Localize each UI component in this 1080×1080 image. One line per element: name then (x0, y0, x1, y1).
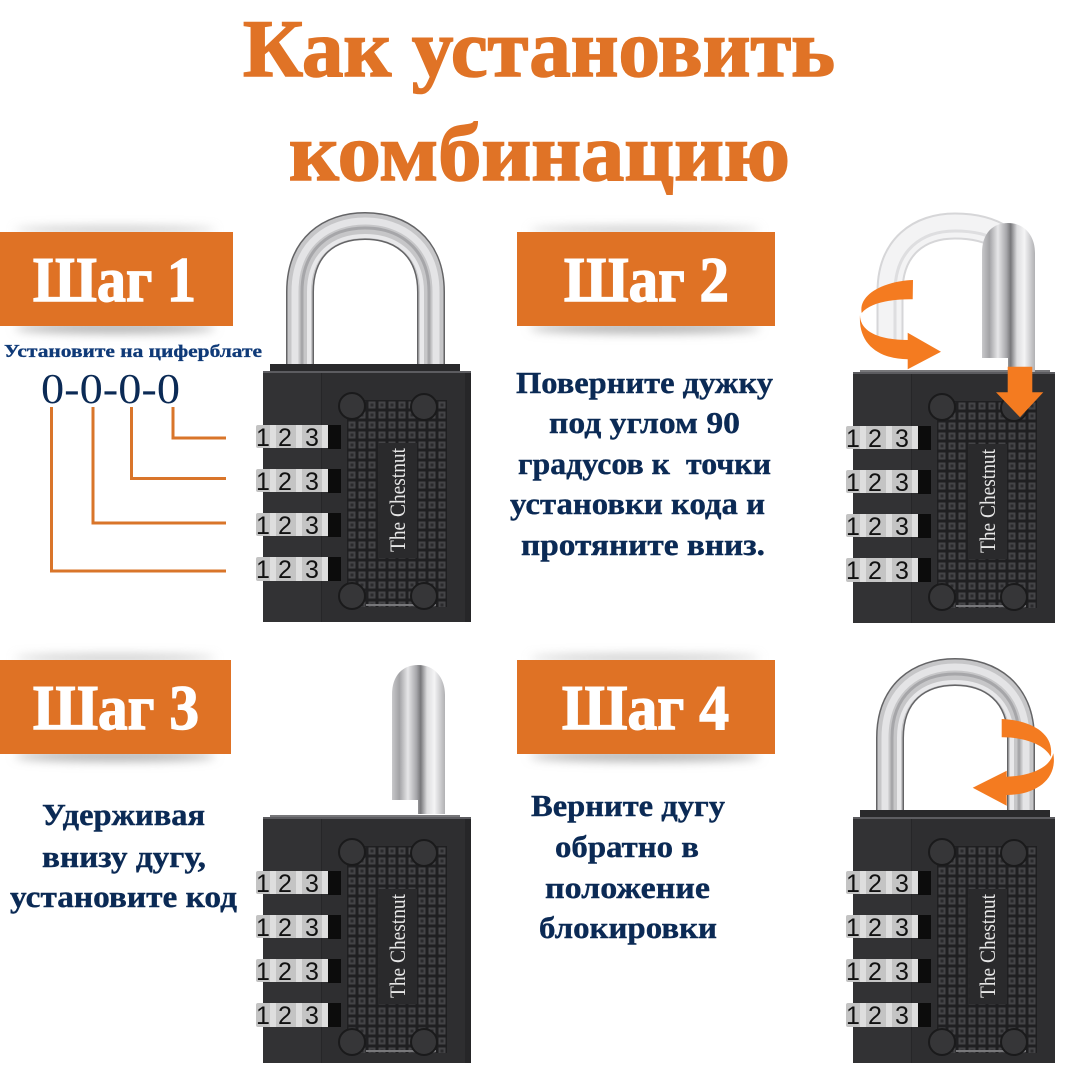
raised shackle: step 2 (982, 223, 1035, 372)
lock: step 4: The Chestnut (975, 894, 1000, 998)
lock: step 1: 123 (256, 556, 319, 584)
icon: rotate arrow, step 4 (973, 719, 1054, 806)
title: Как установить (243, 3, 835, 94)
text: step 2 instructions: под углом 90 (549, 405, 740, 440)
panel: step 4 badge (517, 655, 775, 761)
lock: step 2: 123 (846, 557, 909, 585)
lock: step 1: The Chestnut (385, 448, 410, 552)
lock: step 3: 123 (256, 1002, 319, 1030)
connector lines from digits to dials (52, 407, 226, 571)
lock: step 1: 123 (256, 468, 319, 496)
text: step 2 instructions: Поверните дужку (516, 365, 774, 400)
text: step 4 instructions: обратно в (555, 829, 699, 864)
title (243, 3, 835, 198)
text: step 3 instructions (10, 797, 237, 914)
lock: step 2: 123 (846, 469, 909, 497)
lock: step 2: 123 (846, 513, 909, 541)
ghost shackle: step 2 (890, 226, 1002, 342)
panel: step 1 badge: Шаг 1 (33, 244, 196, 315)
panel: step 3 badge (0, 655, 231, 761)
lock: step 4 (846, 667, 1061, 1068)
lock: step 1: 123 (256, 424, 319, 452)
lock: step 2: The Chestnut (975, 449, 1000, 553)
lock: step 3: 123 (256, 870, 319, 898)
text: step 2 instructions: установки кода и (510, 486, 765, 521)
panel: step 1 badge (0, 227, 233, 333)
lock: step 3: 123 (256, 914, 319, 942)
icon: down arrow, step 2 (996, 367, 1043, 417)
raised shackle: step 3 (392, 665, 445, 814)
icon: rotate arrow, step 2 (860, 280, 941, 369)
text: step 4 instructions: положение (545, 870, 710, 905)
panel: step 4 badge: Шаг 4 (562, 672, 729, 743)
lock: step 3 (256, 815, 471, 1068)
text: step 3 instructions: внизу дугу, (42, 839, 206, 874)
lock: step 1: 123 (256, 512, 319, 540)
panel: step 2 badge: Шаг 2 (564, 244, 729, 315)
lock: step 4: 123 (846, 1002, 909, 1030)
text: step 2 instructions (510, 365, 774, 562)
text: step 3 instructions: Удерживая (42, 797, 205, 832)
text: step 4 instructions (531, 788, 726, 945)
lock: step 2: 123 (846, 425, 909, 453)
lock: step 1 (256, 221, 471, 622)
text: step 2 instructions: протяните вниз. (521, 527, 765, 562)
text: step 3 instructions: установите код (10, 879, 237, 914)
lock: step 4: 123 (846, 958, 909, 986)
lock: step 4: 123 (846, 870, 909, 898)
title: комбинацию (289, 107, 790, 198)
lock: step 2 (846, 370, 1061, 623)
text: step 2 instructions: градусов к точки (518, 446, 771, 481)
code 0-0-0-0: 0-0-0-0 (41, 367, 180, 413)
panel: step 2 badge (517, 227, 775, 333)
text: step 4 instructions: блокировки (539, 910, 717, 945)
lock: step 4: 123 (846, 914, 909, 942)
subtitle: set the dials: Установите на циферблате (4, 341, 262, 361)
lock: step 3: 123 (256, 958, 319, 986)
lock: step 3: The Chestnut (385, 894, 410, 998)
panel: step 3 badge: Шаг 3 (33, 672, 199, 743)
text: step 4 instructions: Верните дугу (531, 788, 726, 823)
